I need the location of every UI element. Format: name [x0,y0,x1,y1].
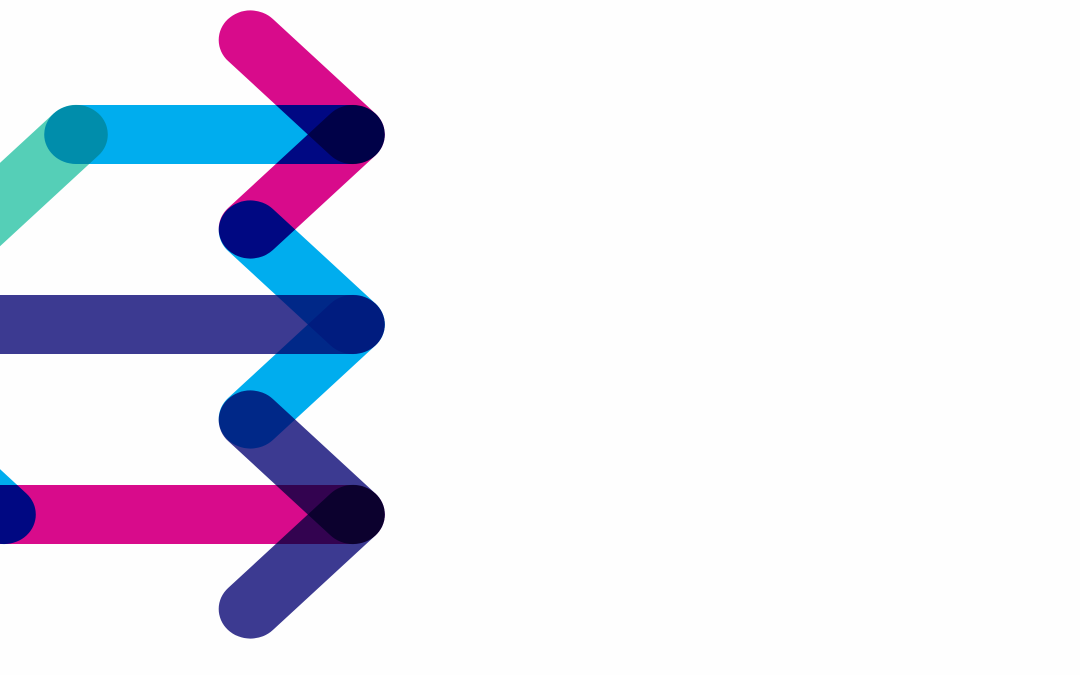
cyan horizontal bar, top [44,105,385,164]
pink lower arm [219,105,385,259]
cyan upper arm [219,200,385,354]
pink upper arm [219,10,385,164]
cyan diagonal band, bottom left [0,390,36,544]
purple arrow head, bottom [219,390,385,639]
purple horizontal bar, middle [0,295,385,354]
cyan lower arm [219,295,385,449]
green diagonal band [0,105,108,259]
purple upper arm [219,390,385,544]
cyan arrow head, middle [219,200,385,449]
pink arrow head, top [219,10,385,259]
purple lower arm [219,485,385,639]
pink horizontal bar, bottom [0,485,385,544]
